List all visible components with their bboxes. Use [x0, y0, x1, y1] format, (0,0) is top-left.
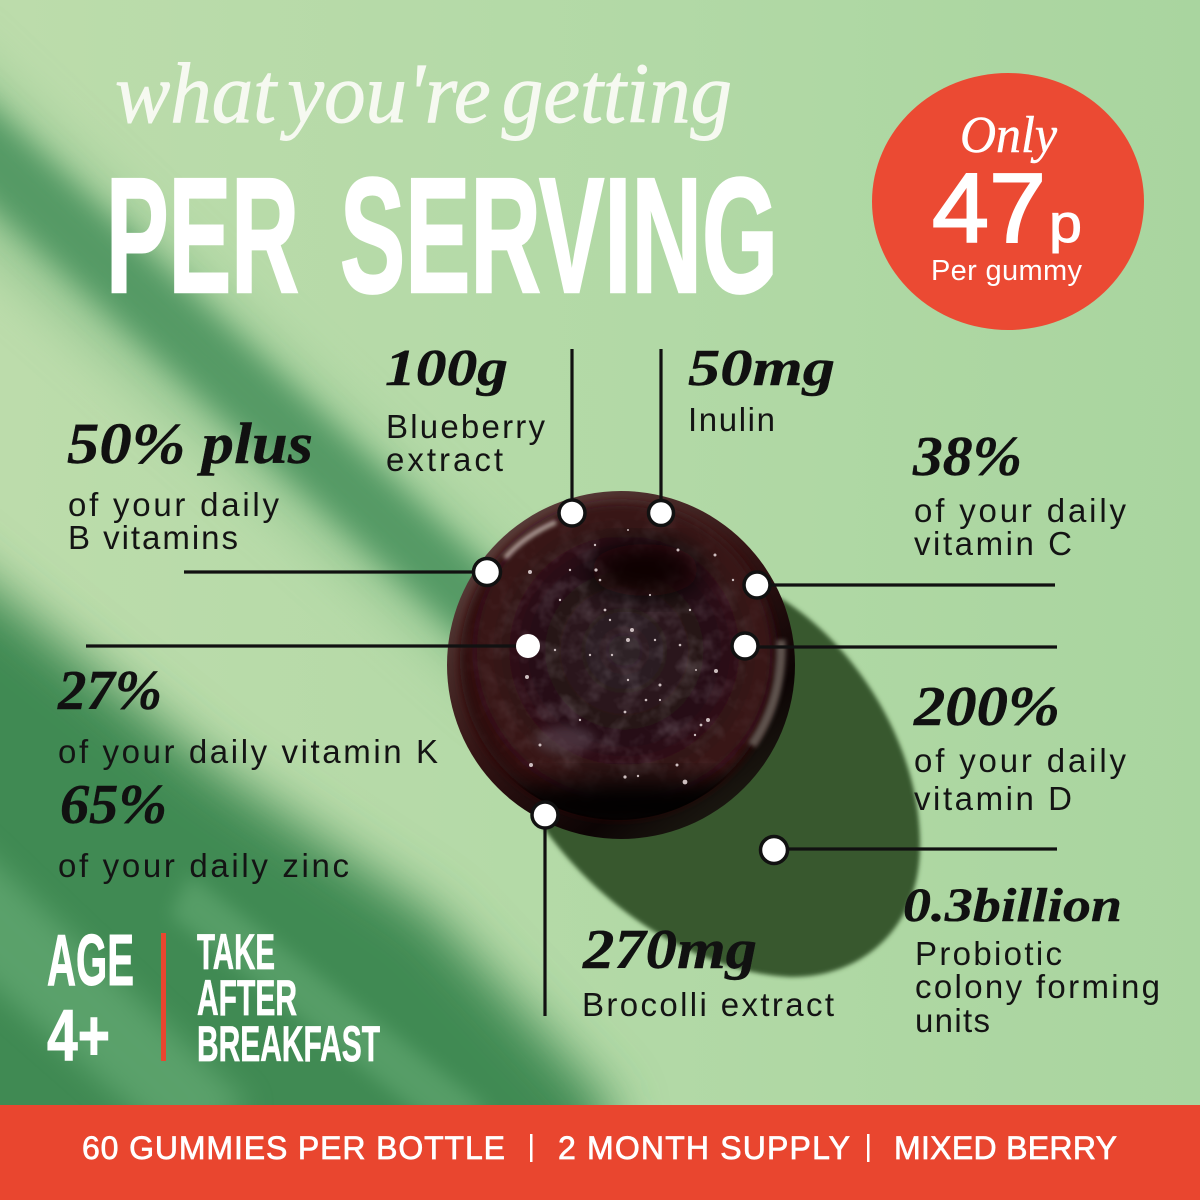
price badge: Only	[960, 107, 1058, 164]
callout: 0.3 billion probiotic: units	[915, 1002, 990, 1039]
gummy shadow	[535, 598, 920, 977]
age note: 4+	[47, 996, 110, 1076]
usage note	[197, 924, 380, 1072]
callout: 50% plus B vitamins: 50% plus	[67, 411, 313, 476]
callout: 200% vitamin D: 200%	[913, 676, 1060, 738]
age note	[47, 921, 134, 1076]
usage note: TAKE	[197, 924, 275, 980]
leader lines and dots	[86, 349, 1057, 1016]
callout: 50% plus B vitamins	[67, 411, 313, 556]
callout: 0.3 billion probiotic: Probiotic	[915, 935, 1062, 972]
callout: 100g blueberry extract: extract	[386, 441, 503, 478]
callout: 27% vitamin K: 27%	[57, 660, 162, 722]
price badge	[872, 73, 1144, 330]
callout: 38% vitamin C: vitamin C	[914, 525, 1072, 562]
bottom banner: 60 GUMMIES PER BOTTLE	[82, 1130, 505, 1166]
callout: 100g blueberry extract: Blueberry	[386, 408, 546, 445]
title: what you're getting: what you're getting	[115, 45, 732, 141]
callout: 0.3 billion probiotic: colony forming	[915, 968, 1160, 1005]
callout: 27% vitamin K	[57, 660, 438, 770]
callout: 50% plus B vitamins: B vitamins	[68, 519, 238, 556]
age note: AGE	[47, 921, 134, 1001]
gummy	[447, 491, 795, 839]
callout: 50mg inulin: Inulin	[688, 401, 775, 438]
bottom banner: 2 MONTH SUPPLY	[558, 1130, 850, 1166]
callout: 50mg inulin: 50mg	[688, 340, 835, 397]
callout: 100g blueberry extract	[385, 340, 546, 478]
title: per serving: SERVING	[340, 144, 778, 327]
title: per serving: PER	[106, 144, 299, 327]
callout: 200% vitamin D: of your daily	[914, 742, 1126, 779]
callout: 270mg broccoli extract: 270mg	[582, 919, 757, 981]
callout: 0.3 billion probiotic: 0.3billion	[903, 879, 1122, 932]
callout: 200% vitamin D	[913, 676, 1126, 817]
callout: 200% vitamin D: vitamin D	[914, 780, 1072, 817]
callout: 50% plus B vitamins: of your daily	[68, 486, 280, 523]
bottom banner: MIXED BERRY	[894, 1130, 1117, 1166]
price badge: Per gummy	[931, 255, 1082, 287]
price badge: 47	[932, 153, 1046, 263]
callout: 38% vitamin C: of your daily	[914, 492, 1126, 529]
callout: 65% zinc: 65%	[60, 774, 167, 836]
price badge: p	[1049, 194, 1082, 254]
title: per serving	[106, 144, 778, 327]
usage note: BREAKFAST	[197, 1016, 380, 1072]
usage note: AFTER	[197, 970, 297, 1026]
callout: 50mg inulin	[688, 340, 835, 438]
callout: 38% vitamin C	[912, 426, 1126, 562]
callout: 270mg broccoli extract: Brocolli extract	[582, 986, 834, 1023]
callout: 65% zinc: of your daily zinc	[58, 847, 349, 884]
callout: 270mg broccoli extract	[582, 919, 834, 1023]
callout: 27% vitamin K: of your daily vitamin K	[58, 733, 438, 770]
callout: 65% zinc	[58, 774, 349, 884]
callout: 38% vitamin C: 38%	[912, 426, 1022, 488]
red divider	[161, 933, 166, 1061]
callout: 0.3 billion probiotic	[903, 879, 1160, 1039]
callout: 100g blueberry extract: 100g	[385, 340, 508, 397]
bottom banner	[0, 1105, 1200, 1200]
